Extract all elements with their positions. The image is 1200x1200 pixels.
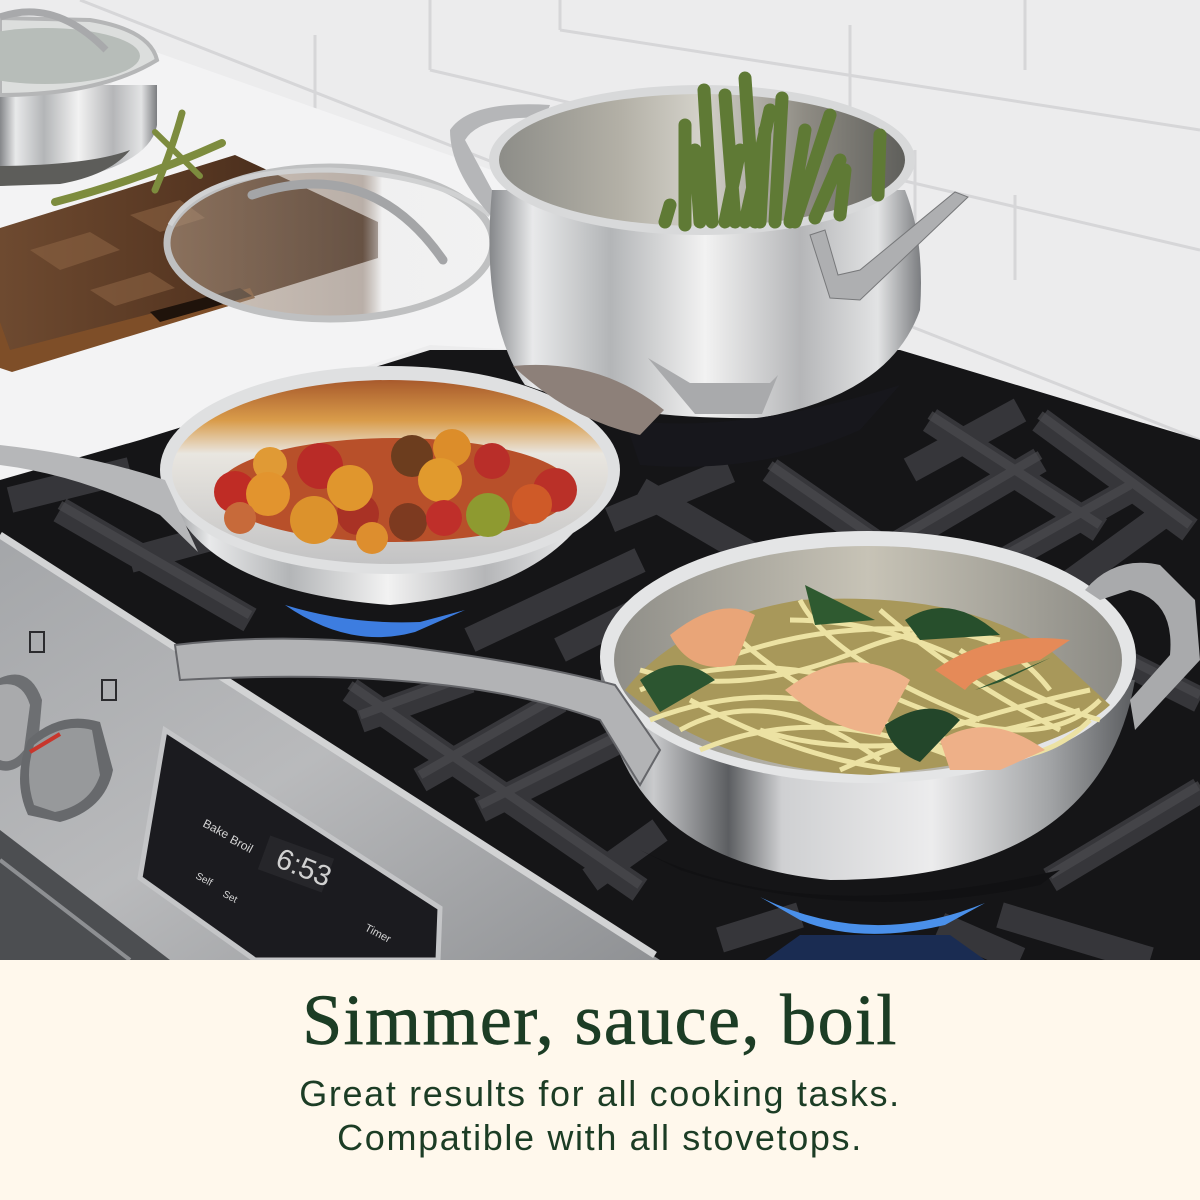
burner base <box>765 935 985 960</box>
white countertop <box>0 50 520 490</box>
control knobs <box>0 674 113 822</box>
burner icons on panel <box>30 632 116 700</box>
stove top dark base <box>0 350 1200 960</box>
blue flame under small pan <box>285 605 465 637</box>
oven display panel: Set <box>221 889 239 906</box>
stainless range front <box>0 535 660 960</box>
oven display panel: Self <box>194 871 214 889</box>
subheading text: Compatible with all stovetops. <box>337 1117 863 1158</box>
small frying pan <box>0 366 620 605</box>
cutting board <box>0 155 378 372</box>
ladle reflection and spoon rest <box>513 365 664 435</box>
tile wall <box>0 0 1200 500</box>
asparagus in pot <box>665 78 880 225</box>
oven display panel: Broil <box>228 832 255 856</box>
heading: Simmer, sauce, boil <box>302 980 898 1060</box>
subheading text <box>299 1073 901 1158</box>
sauté pan <box>175 531 1200 902</box>
glass lid <box>167 167 493 319</box>
blue flame under sauté pan <box>760 897 985 934</box>
display time: 6:53 <box>271 843 336 894</box>
pasta with shrimp and spinach <box>625 585 1110 775</box>
product photo: cookware on stove <box>0 0 1200 960</box>
oven display panel <box>140 730 440 960</box>
stock pot <box>450 85 968 467</box>
small covered pot, top left <box>0 12 157 186</box>
cherry tomatoes <box>214 429 577 554</box>
asparagus on board <box>55 113 222 202</box>
cast iron grates <box>10 410 1200 960</box>
subheading text: Great results for all cooking tasks. <box>299 1073 901 1114</box>
oven display panel: Timer <box>363 922 393 946</box>
caption panel <box>0 960 1200 1200</box>
oven display panel: Bake <box>201 816 232 842</box>
